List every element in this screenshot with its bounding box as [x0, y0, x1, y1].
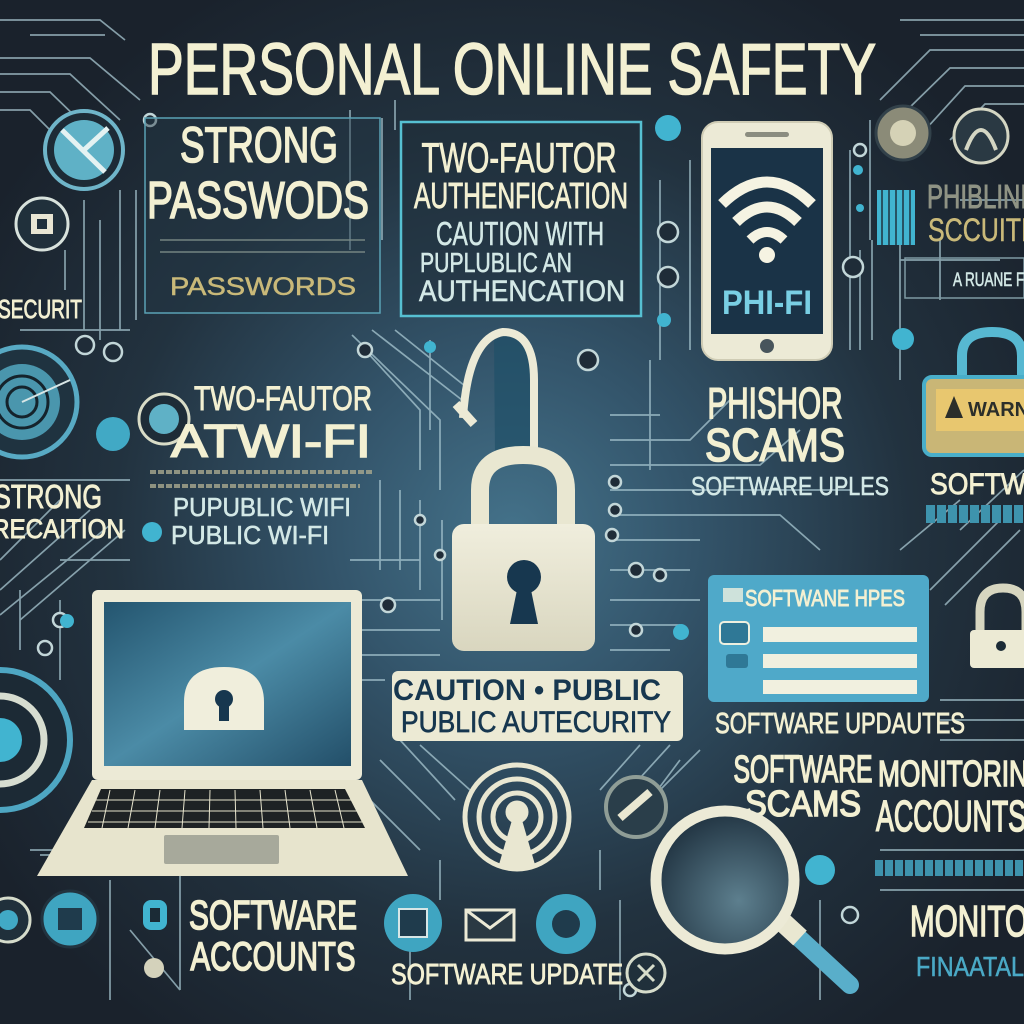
icon: radial target: [0, 670, 70, 810]
text: two-factor at wi-fi: ATWI-FI: [171, 415, 371, 467]
text: phishing scams: SCAMS: [705, 419, 845, 471]
panel: two-factor authentication: CAUTION WITH: [436, 215, 604, 252]
panel: two-factor authentication: TWO-FAUTOR: [422, 134, 616, 181]
icon: globe badge: [45, 111, 123, 189]
icon: padlock right: [970, 588, 1024, 668]
text: software accounts: SOFTWARE: [189, 892, 357, 938]
text: monitoring accounts: [876, 753, 1024, 841]
text: two-factor at wi-fi: PUPUBLIC WIFI: [173, 492, 351, 522]
panel: strong passwords: PASSWORDS: [170, 273, 356, 301]
label: caution public security: CAUTION • PUBLIC: [393, 674, 661, 707]
text: software accounts: ACCOUNTS: [190, 935, 356, 979]
text: software scams: [734, 749, 872, 824]
text: two-factor at wi-fi: PUBLIC WI-FI: [171, 520, 329, 550]
text: phishing scams: PHISHOR: [708, 379, 842, 428]
icon: small badges top right: [876, 106, 1008, 245]
panel: two-factor authentication: [401, 122, 641, 316]
label: caution public security: [392, 671, 683, 741]
text: two-factor at wi-fi: [96, 380, 372, 550]
text: two-factor at wi-fi: TWO-FAUTOR: [194, 380, 372, 418]
icon: warning padlock: [924, 332, 1024, 455]
text: software update: SOFTWARE UPDATE: [391, 959, 623, 991]
icons: bottom row: [0, 891, 665, 992]
label: software partial: [926, 468, 1024, 514]
label: securit: SECURIT: [0, 294, 82, 324]
icon: small security badge: [16, 198, 68, 250]
text: software accounts: [189, 892, 357, 979]
panel: two-factor authentication: AUTHENFICATION: [414, 175, 628, 216]
text: software scams: SCAMS: [745, 783, 861, 824]
text: phishing scams: [691, 379, 889, 501]
panel: strong passwords: PASSWODS: [147, 172, 369, 230]
panel: strong passwords: STRONG: [180, 117, 338, 173]
icon: magnifying glass: [656, 811, 850, 985]
panel: software updates card: SOFTWANE HPES: [745, 585, 905, 611]
icon: radar fingerprint: [465, 765, 666, 869]
text: phishing scams: SOFTWARE UPLES: [691, 471, 889, 501]
label: caution public security: PUBLIC AUTECURITY: [401, 706, 671, 739]
label: strong recaition: [0, 478, 124, 544]
icon: fingerprint badge: [0, 347, 77, 457]
icon: laptop: [37, 590, 408, 876]
panel: software updates card: [708, 575, 929, 702]
icon: smartphone with wi-fi: PHI-FI: [722, 284, 812, 322]
panel: two-factor authentication: PUPLUBLIC AN: [420, 247, 572, 278]
main padlock: [452, 332, 595, 651]
panel: strong passwords: [145, 117, 380, 313]
panel: phishing security partial: [905, 178, 1024, 298]
text: monitor financial: [910, 897, 1024, 982]
icon: smartphone with wi-fi: [702, 122, 832, 360]
text: software scams: SOFTWARE: [734, 749, 872, 791]
panel: two-factor authentication: AUTHENCATION: [419, 275, 625, 308]
